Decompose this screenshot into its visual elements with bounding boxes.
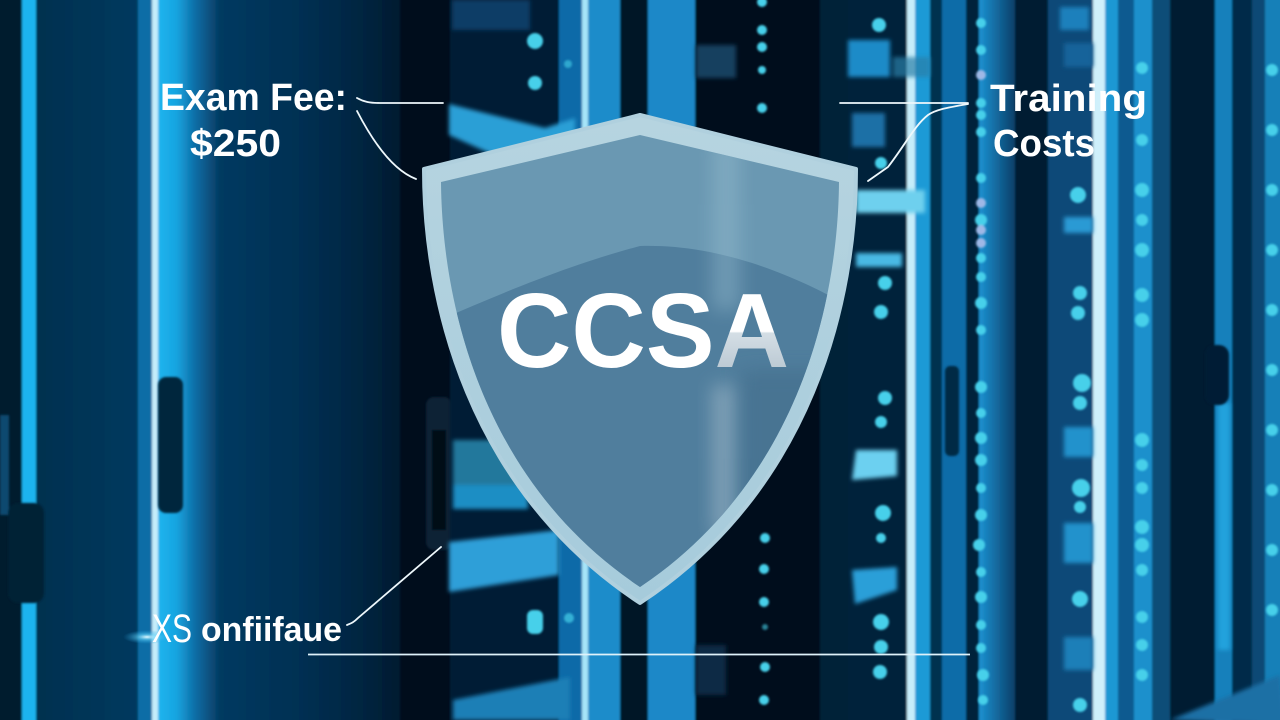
- label: exam fee: [160, 77, 347, 165]
- right door handles: [945, 345, 1229, 456]
- label: exam fee: $250: [190, 123, 281, 165]
- column 1142: [1136, 62, 1148, 74]
- label: software: onfiifaue: [201, 611, 342, 649]
- left door handles: [0, 377, 452, 603]
- rack panels: [449, 0, 1280, 720]
- label: software: XS: [152, 607, 192, 651]
- column 1272: [1266, 64, 1278, 76]
- column 762: [757, 0, 767, 7]
- connector: software to shield: [347, 547, 441, 625]
- baseline rule: [308, 654, 970, 656]
- label: software: [152, 607, 342, 651]
- shield frame: [424, 115, 856, 603]
- label: training costs: Costs: [993, 123, 1095, 165]
- column 881: [872, 18, 886, 32]
- column 1078: [1070, 187, 1086, 203]
- centre rack bands: [450, 0, 1280, 720]
- shield inner face: [441, 135, 839, 587]
- column 981: [976, 18, 986, 28]
- label: exam fee: Exam Fee:: [160, 77, 347, 119]
- label: training costs: [990, 78, 1147, 165]
- connector: exam fee to shield: [357, 98, 443, 179]
- label: training costs: Training: [990, 78, 1147, 120]
- shield reflection: light column: [712, 140, 740, 310]
- left server column bands: [0, 0, 452, 720]
- lens flare: [123, 630, 171, 644]
- shield reflection: darker lower area: [456, 246, 828, 587]
- connector: training costs to shield: [840, 103, 968, 181]
- shield label CCSA: CCSA: [497, 272, 789, 390]
- left rack LEDs: [527, 33, 543, 49]
- rack LED dots: [527, 0, 1278, 712]
- icon: shield: [424, 115, 856, 603]
